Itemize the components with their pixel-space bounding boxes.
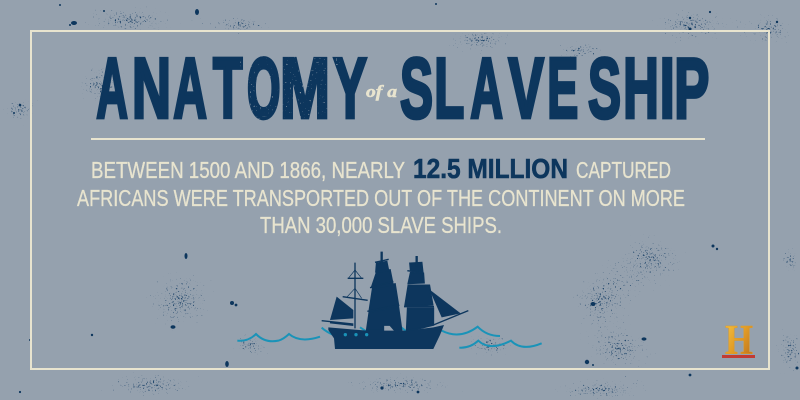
title word: SLAVE: E xyxy=(547,41,578,136)
title word: SLAVE: A xyxy=(470,41,503,136)
title word: SHIP: S xyxy=(588,41,621,136)
title rule xyxy=(91,138,705,140)
title connector: of a: of a xyxy=(366,82,398,101)
intro line 1 xyxy=(91,153,671,184)
title word: ANATOMY: Y xyxy=(333,41,367,136)
intro line 3: THAN 30,000 SLAVE SHIPS. xyxy=(260,212,502,238)
intro text xyxy=(77,153,685,238)
title word: ANATOMY: A xyxy=(96,41,128,136)
History logo: H xyxy=(725,318,753,364)
title word: SHIP: I xyxy=(660,41,675,136)
title wear flecks xyxy=(245,57,330,119)
title word: ANATOMY xyxy=(96,41,367,136)
title word: SHIP: H xyxy=(623,41,659,136)
title word: ANATOMY: N xyxy=(132,41,171,136)
title word: ANATOMY: A xyxy=(173,41,207,136)
intro line 1: 12.5 MILLION xyxy=(413,153,568,184)
title word: SLAVE xyxy=(400,41,578,136)
ship with waves xyxy=(237,252,542,349)
title word: SLAVE: V xyxy=(508,41,544,136)
title word: ANATOMY: O xyxy=(247,41,280,136)
waves xyxy=(237,327,542,348)
title word: SHIP xyxy=(588,41,709,136)
intro line 1: CAPTURED xyxy=(576,157,671,183)
title word: SLAVE: S xyxy=(400,41,433,136)
frame xyxy=(31,31,769,369)
title word: ANATOMY: M xyxy=(280,41,330,136)
title xyxy=(96,41,709,136)
ship xyxy=(322,252,468,349)
title word: SLAVE: L xyxy=(434,41,464,136)
title word: SHIP: P xyxy=(674,41,709,136)
title word: ANATOMY: T xyxy=(213,41,242,136)
intro line 1: BETWEEN 1500 AND 1866, NEARLY xyxy=(91,157,405,183)
portholes xyxy=(344,333,368,336)
